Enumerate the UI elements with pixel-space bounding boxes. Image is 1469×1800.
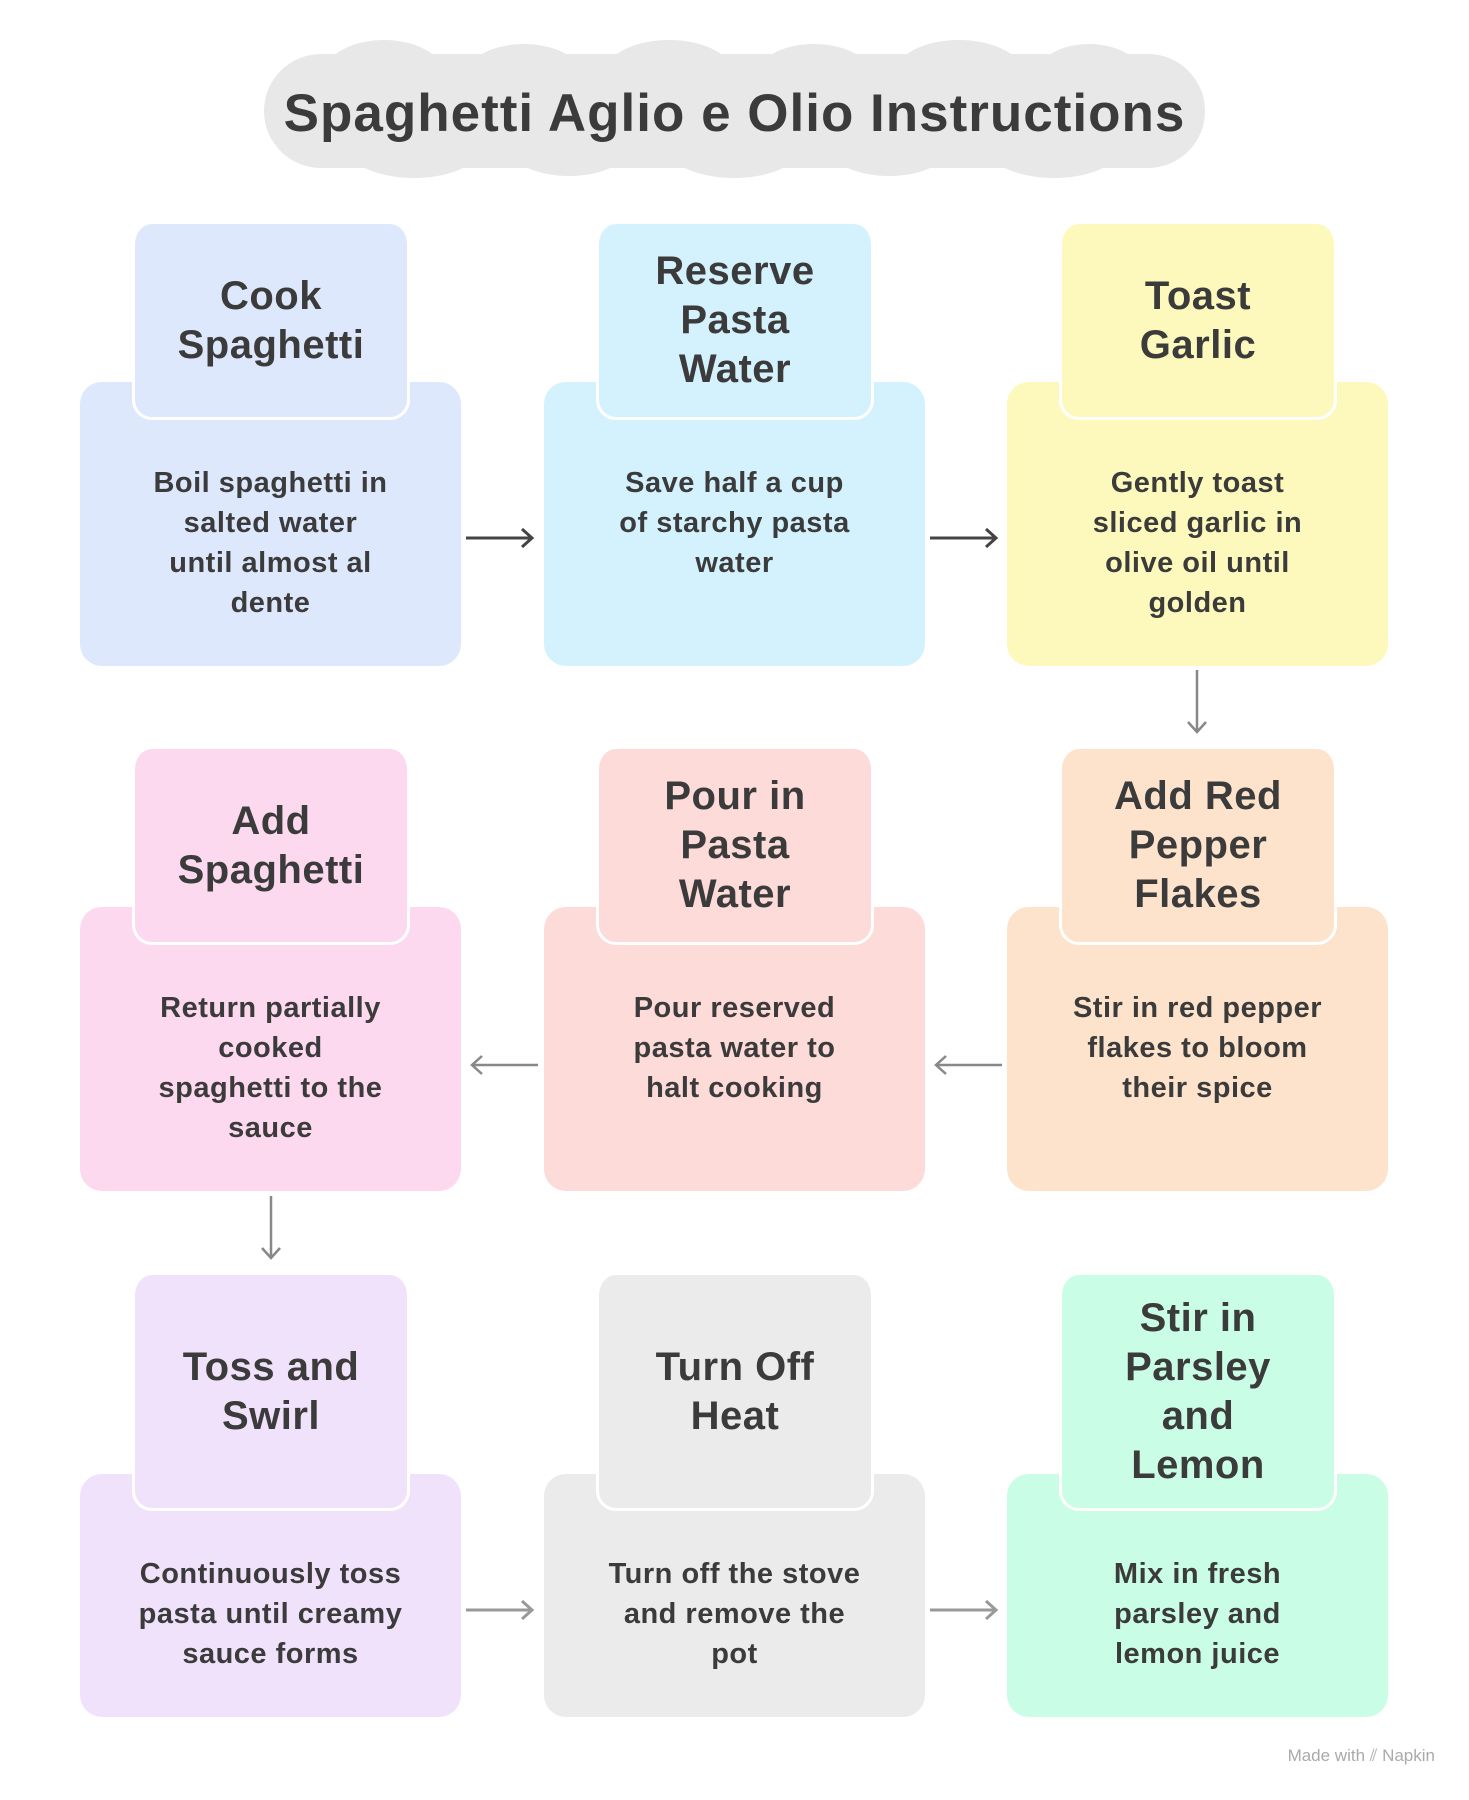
step 2: Reserve Pasta Water: Pasta	[680, 298, 790, 342]
step 1: Cook Spaghetti: Boil spaghetti in	[153, 467, 388, 499]
step 9: Stir in Parsley and Lemon: Parsley	[1125, 1344, 1271, 1388]
step 7: Toss and Swirl: Continuously toss	[140, 1558, 401, 1590]
step 5: Pour in Pasta Water: Pasta	[680, 823, 790, 867]
step 1: Cook Spaghetti: dente	[231, 587, 310, 619]
step 9: Stir in Parsley and Lemon: and	[1162, 1394, 1234, 1438]
step 8: Turn Off Heat: Turn Off	[656, 1344, 814, 1388]
step 4: Add Red Pepper Flakes: Add Red	[1114, 774, 1282, 818]
step 2: Reserve Pasta Water: Save half a cup	[625, 467, 844, 499]
step 3: Toast Garlic: golden	[1148, 587, 1247, 619]
step 3: Toast Garlic: sliced garlic in	[1093, 507, 1302, 539]
step 3: Toast Garlic: Garlic	[1140, 322, 1256, 366]
arrow 4-5	[934, 1055, 1002, 1075]
step 6: Add Spaghetti: cooked	[218, 1032, 323, 1064]
step 3: Toast Garlic	[1007, 224, 1388, 666]
title: Spaghetti Aglio e Olio Instructions	[284, 84, 1185, 143]
step 5: Pour in Pasta Water: halt cooking	[646, 1072, 823, 1104]
step 7: Toss and Swirl: sauce forms	[182, 1638, 359, 1670]
step 5: Pour in Pasta Water: pasta water to	[634, 1032, 836, 1064]
arrow 5-6	[470, 1055, 538, 1075]
step 1: Cook Spaghetti: Spaghetti	[178, 322, 364, 366]
step 8: Turn Off Heat: pot	[711, 1638, 758, 1670]
step 6: Add Spaghetti	[80, 749, 461, 1191]
step 7: Toss and Swirl: Toss and	[183, 1344, 359, 1388]
step 7: Toss and Swirl: pasta until creamy	[139, 1598, 402, 1630]
step 9: Stir in Parsley and Lemon: parsley and	[1114, 1598, 1281, 1630]
step 9: Stir in Parsley and Lemon: lemon juice	[1115, 1638, 1280, 1670]
step 1: Cook Spaghetti: salted water	[184, 507, 357, 539]
step 6: Add Spaghetti: Return partially	[160, 992, 381, 1024]
step 2: Reserve Pasta Water	[544, 224, 925, 666]
step 6: Add Spaghetti: Add	[231, 798, 311, 842]
step 5: Pour in Pasta Water: Pour reserved	[634, 992, 835, 1024]
arrow 8-9	[930, 1600, 998, 1620]
step 5: Pour in Pasta Water	[544, 749, 925, 1191]
arrow 2-3	[930, 528, 998, 548]
step 8: Turn Off Heat: Heat	[691, 1394, 779, 1438]
step 4: Add Red Pepper Flakes: their spice	[1122, 1072, 1273, 1104]
arrow 6-7 down	[261, 1196, 281, 1260]
step 3: Toast Garlic: Toast	[1145, 274, 1251, 318]
arrow 7-8	[466, 1600, 534, 1620]
step 8: Turn Off Heat	[544, 1275, 925, 1717]
step 9: Stir in Parsley and Lemon: Stir in	[1140, 1296, 1256, 1340]
step 5: Pour in Pasta Water: Pour in	[664, 774, 806, 818]
title cloud	[264, 40, 1205, 178]
step 9: Stir in Parsley and Lemon: Mix in fresh	[1114, 1558, 1281, 1590]
arrow 3-4 down	[1187, 670, 1207, 734]
step 6: Add Spaghetti: spaghetti to the	[159, 1072, 382, 1104]
step 1: Cook Spaghetti: Cook	[220, 274, 322, 318]
footer: made with napkin: Made with ⫽ Napkin	[1288, 1746, 1435, 1765]
step 7: Toss and Swirl: Swirl	[222, 1394, 320, 1438]
step 3: Toast Garlic: Gently toast	[1111, 467, 1284, 499]
step 9: Stir in Parsley and Lemon: Lemon	[1131, 1442, 1265, 1486]
step 4: Add Red Pepper Flakes	[1007, 749, 1388, 1191]
step 4: Add Red Pepper Flakes: flakes to bloom	[1087, 1032, 1308, 1064]
step 1: Cook Spaghetti: until almost al	[169, 547, 372, 579]
step 4: Add Red Pepper Flakes: Pepper	[1129, 823, 1267, 867]
step 8: Turn Off Heat: and remove the	[624, 1598, 845, 1630]
arrow 1-2	[466, 528, 534, 548]
step 2: Reserve Pasta Water: Reserve	[655, 249, 815, 293]
step 5: Pour in Pasta Water: Water	[679, 872, 791, 916]
step 9: Stir in Parsley and Lemon	[1007, 1275, 1388, 1717]
step 2: Reserve Pasta Water: of starchy pasta	[619, 507, 850, 539]
step 6: Add Spaghetti: sauce	[228, 1112, 313, 1144]
step 2: Reserve Pasta Water: water	[695, 547, 774, 579]
step 4: Add Red Pepper Flakes: Stir in red pepper	[1073, 992, 1322, 1024]
step 8: Turn Off Heat: Turn off the stove	[609, 1558, 860, 1590]
step 1: Cook Spaghetti	[80, 224, 461, 666]
step 2: Reserve Pasta Water: Water	[679, 347, 791, 391]
step 7: Toss and Swirl	[80, 1275, 461, 1717]
step 4: Add Red Pepper Flakes: Flakes	[1134, 872, 1262, 916]
step 6: Add Spaghetti: Spaghetti	[178, 848, 364, 892]
step 3: Toast Garlic: olive oil until	[1105, 547, 1290, 579]
